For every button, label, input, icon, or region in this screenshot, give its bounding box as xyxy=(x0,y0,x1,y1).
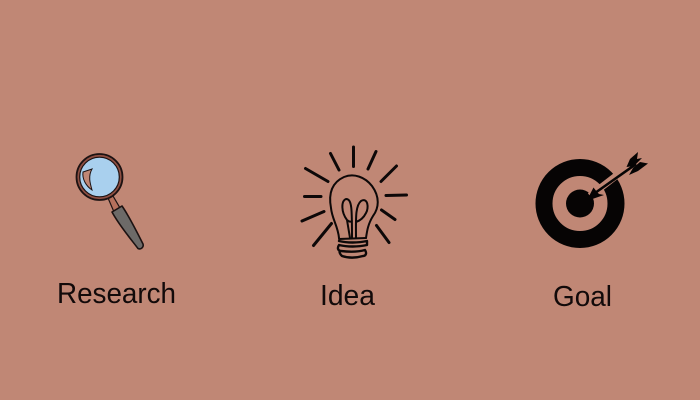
label: Goal: Goal xyxy=(553,281,612,313)
icon: target with arrow xyxy=(544,152,648,240)
icon: light bulb xyxy=(302,147,406,258)
label: Research: Research xyxy=(57,278,176,310)
label: Idea: Idea xyxy=(320,280,375,312)
icon: magnifying glass xyxy=(76,154,143,249)
